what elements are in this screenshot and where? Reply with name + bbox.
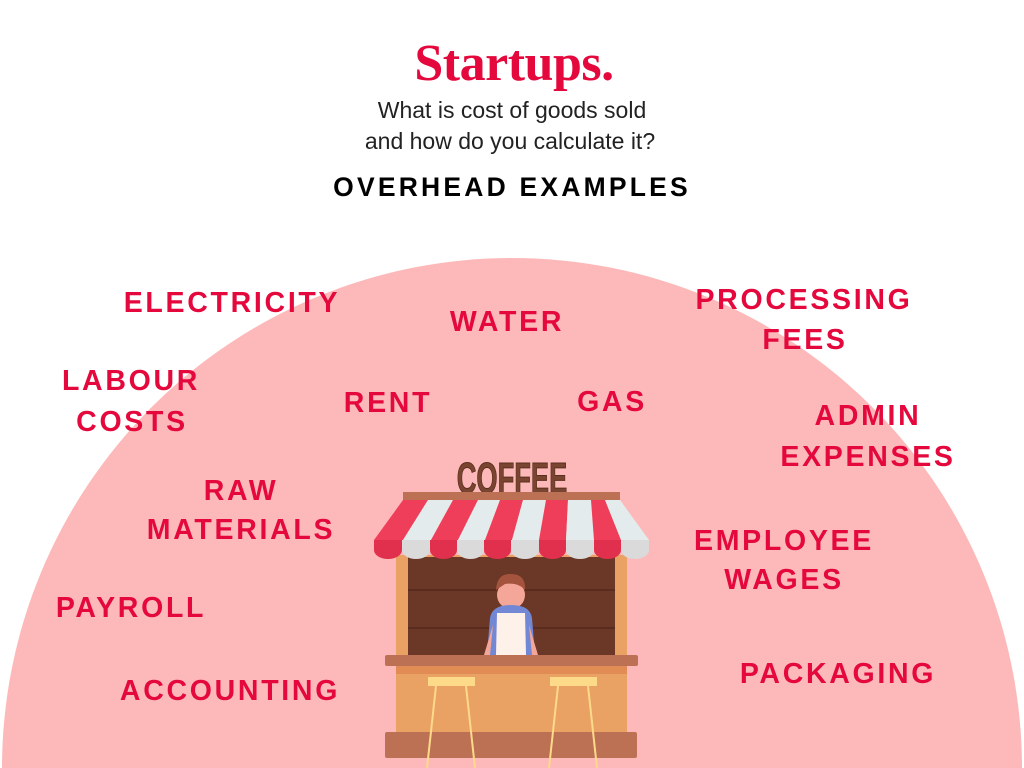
overhead labels: FEES xyxy=(762,324,848,356)
subtitle: What is cost of goods sold xyxy=(378,97,646,123)
overhead labels: RENT xyxy=(344,387,432,419)
stools xyxy=(427,686,597,768)
overhead labels: ACCOUNTING xyxy=(120,675,340,707)
overhead labels xyxy=(56,284,956,707)
subtitle xyxy=(365,97,655,154)
overhead labels: RAW xyxy=(204,475,278,507)
overhead labels: ELECTRICITY xyxy=(124,287,340,319)
overhead labels: PAYROLL xyxy=(56,592,206,624)
overhead labels: LABOUR xyxy=(62,365,200,397)
awning xyxy=(374,500,649,559)
title: Startups. xyxy=(414,35,614,92)
overhead labels: GAS xyxy=(577,386,647,418)
overhead labels: PACKAGING xyxy=(740,658,936,690)
sign: COFFEE xyxy=(457,453,567,503)
overhead labels: EXPENSES xyxy=(780,441,956,473)
overhead labels: EMPLOYEE xyxy=(694,525,874,557)
overhead labels: WATER xyxy=(450,306,564,338)
person xyxy=(484,574,538,655)
overhead labels: ADMIN xyxy=(815,400,921,432)
coffee stand illustration xyxy=(374,453,649,768)
heading: OVERHEAD EXAMPLES xyxy=(333,172,691,202)
overhead labels: MATERIALS xyxy=(147,514,335,546)
overhead labels: PROCESSING xyxy=(695,284,913,316)
overhead labels: WAGES xyxy=(724,564,844,596)
overhead labels: COSTS xyxy=(76,406,188,438)
counter xyxy=(385,655,638,666)
booth body xyxy=(396,555,627,735)
subtitle: and how do you calculate it? xyxy=(365,128,655,154)
background arch xyxy=(2,258,1022,768)
